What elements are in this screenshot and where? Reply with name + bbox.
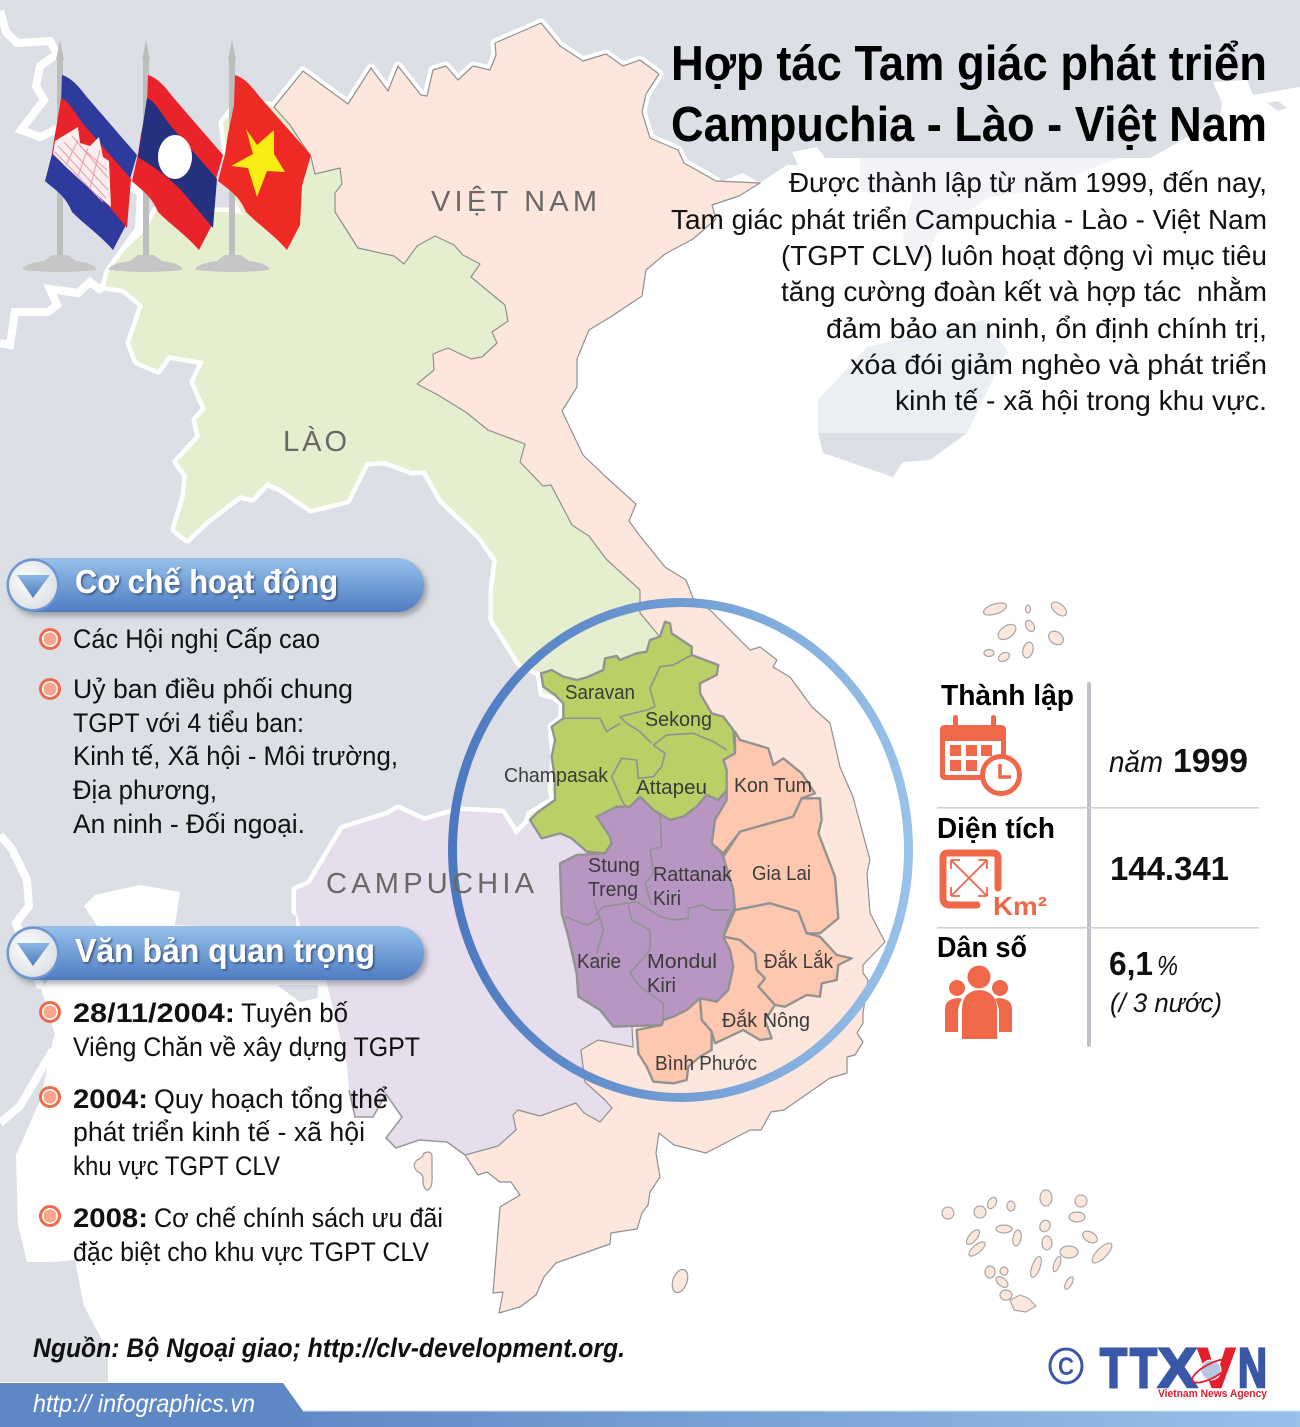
province labels: Kon Tum: [734, 775, 812, 797]
icon: calendar and clock: [940, 715, 1020, 794]
stat: Diện tích: Diện tích: [937, 813, 1055, 845]
list: Văn bản quan trọng: 2004:: [73, 1084, 148, 1114]
value: 6,1% / 3 nước: [1109, 945, 1222, 1018]
provinces: Kon Tum: [712, 732, 815, 853]
province labels: [504, 682, 834, 1075]
flag poles and bases: [23, 40, 269, 272]
logo: TTXVN: V: [1198, 1336, 1235, 1399]
list: Cơ chế hoạt động: [40, 624, 398, 839]
logo: TTXVN: X: [1158, 1336, 1197, 1399]
provinces: Lào (green): [530, 622, 735, 853]
value: năm 1999: năm: [1109, 746, 1163, 779]
province labels: Bình Phước: [655, 1053, 757, 1075]
bullet: [40, 680, 60, 698]
value: 6,1% / 3 nước: 6,1: [1109, 945, 1153, 982]
logo: TTXVN: T: [1100, 1336, 1127, 1399]
map: Cambodia coastline: [349, 1090, 465, 1155]
value: năm 1999: 1999: [1173, 742, 1248, 779]
province labels: Kiri: [653, 888, 681, 910]
map: Việt Nam: [274, 23, 885, 1313]
country labels: [283, 185, 597, 900]
country labels: CAMPUCHIA: [326, 868, 535, 900]
stats dividers: [937, 682, 1259, 1047]
section header: Cơ chế hoạt động: [6, 558, 424, 612]
provinces: Bình Phước: [637, 998, 712, 1083]
bullet: [40, 1002, 60, 1022]
logo: TTXVN: T: [1130, 1336, 1157, 1399]
province labels: Sekong: [645, 709, 712, 731]
map: Trường Sa islands: [942, 1190, 1115, 1312]
intro paragraph: Tam giác phát triển Campuchia - Lào - Việt Nam: [671, 204, 1267, 235]
value: năm 1999: [1109, 742, 1248, 779]
circle highlight around the TGPT area: [452, 602, 908, 1098]
list: Cơ chế hoạt động: An ninh - Đối ngoại.: [73, 809, 305, 839]
stat: Thành lập: Thành lập: [941, 680, 1074, 712]
logo: TTXVN: [1050, 1336, 1268, 1400]
list: Văn bản quan trọng: 28/11/2004:: [73, 998, 235, 1028]
provinces: Campuchia (purple): [560, 790, 735, 1027]
provinces: Đắk Nông: [700, 937, 775, 1043]
list: Cơ chế hoạt động: Kinh tế, Xã hội - Môi trường,: [73, 741, 398, 771]
list: Văn bản quan trọng: Cơ chế chính sách ưu đãi: [154, 1203, 443, 1233]
logo: TTXVN: C: [1058, 1353, 1074, 1381]
map: Phú Quốc island: [414, 1152, 432, 1190]
section header: Văn bản quan trọng: Văn bản quan trọng: [75, 932, 375, 969]
province labels: Champasak: [504, 765, 609, 787]
bullet: [40, 1206, 60, 1226]
intro paragraph: đảm bảo an ninh, ổn định chính trị,: [826, 313, 1267, 344]
list: Văn bản quan trọng: 2008:: [73, 1203, 148, 1233]
footer band: [0, 1383, 1300, 1427]
list: Cơ chế hoạt động: TGPT với 4 tiểu ban:: [73, 708, 304, 738]
icon: people: [945, 966, 1012, 1039]
map: Lào: [105, 100, 680, 823]
stats panel: [937, 680, 1259, 1047]
list: Văn bản quan trọng: Quy hoạch tổng thể: [154, 1084, 388, 1114]
province labels: Stung: [588, 855, 640, 877]
intro paragraph: (TGPT CLV) luôn hoạt động vì mục tiêu: [781, 240, 1267, 271]
title: Hợp tác Tam giác phát triển: [671, 37, 1267, 91]
icon: area in square kilometres: [943, 853, 1047, 921]
list: Cơ chế hoạt động: Địa phương,: [73, 775, 217, 805]
province labels: Treng: [588, 879, 638, 901]
list: Văn bản quan trọng: [40, 998, 443, 1267]
section header: Cơ chế hoạt động: Cơ chế hoạt động: [75, 563, 338, 600]
map: TGPT CLV provinces: [530, 622, 852, 1083]
stat: Dân số: Dân số: [937, 932, 1027, 964]
map: Côn Đảo island: [669, 1267, 691, 1295]
bullet: [40, 630, 60, 648]
footer band: http:// infographics.vn: [33, 1390, 255, 1418]
section header: Văn bản quan trọng: [6, 926, 424, 980]
flags on poles: [23, 40, 311, 272]
country outlines: white border strokes: [105, 23, 716, 1047]
province labels: Saravan: [565, 682, 635, 704]
provinces: Gia Lai: [723, 798, 838, 933]
list: Cơ chế hoạt động: Các Hội nghị Cấp cao: [73, 624, 320, 654]
province labels: Mondul: [647, 951, 717, 973]
province labels: Đắk Lắk: [764, 950, 834, 973]
flag: Campuchia: [45, 75, 137, 250]
title: Campuchia - Lào - Việt Nam: [671, 98, 1267, 152]
provinces: Đắk Lắk: [723, 903, 852, 1007]
list: Văn bản quan trọng: phát triển kinh tế - xã hội: [73, 1117, 365, 1147]
intro paragraph: xóa đói giảm nghèo và phát triển: [850, 349, 1267, 380]
country labels: LÀO: [283, 425, 347, 458]
list: Văn bản quan trọng: Viêng Chăn về xây dựng TGPT: [73, 1032, 420, 1062]
value: 144.341: 144.341: [1110, 850, 1229, 887]
map: Hoàng Sa islands: [982, 599, 1069, 663]
province labels: Đắk Nông: [722, 1009, 810, 1032]
list: Văn bản quan trọng: Tuyên bố: [241, 998, 348, 1028]
intro paragraph: Được thành lập từ năm 1999, đến nay,: [789, 167, 1267, 198]
list: Văn bản quan trọng: khu vực TGPT CLV: [73, 1151, 280, 1181]
flag: Lào: [132, 75, 223, 250]
province labels: Kiri: [647, 975, 676, 997]
value: 6,1% / 3 nước: %: [1157, 950, 1178, 981]
country labels: VIỆT NAM: [431, 185, 597, 218]
icon: area in square kilometres: Km²: [993, 891, 1047, 921]
logo: TTXVN: N: [1238, 1336, 1267, 1399]
flag: Việt Nam: [218, 75, 311, 250]
source line: Nguồn: Bộ Ngoại giao; http://clv-development.org.: [33, 1333, 625, 1363]
list: Văn bản quan trọng: đặc biệt cho khu vực TGPT CLV: [73, 1237, 429, 1267]
province labels: Gia Lai: [752, 863, 811, 885]
province labels: Karie: [577, 951, 621, 973]
title: [671, 37, 1267, 152]
province labels: Attapeu: [636, 777, 707, 799]
map: Campuchia: [296, 809, 660, 1155]
provinces: internal borders: [563, 655, 730, 1020]
intro paragraph: [671, 167, 1267, 416]
bullet: [40, 1088, 60, 1106]
logo: TTXVN: Vietnam News Agency: [1158, 1388, 1268, 1400]
province labels: Rattanak: [653, 864, 733, 886]
intro paragraph: tăng cường đoàn kết và hợp tác nhằm: [781, 276, 1267, 307]
value: 6,1% / 3 nước: (/ 3 nước): [1110, 988, 1222, 1018]
intro paragraph: kinh tế - xã hội trong khu vực.: [895, 385, 1267, 416]
list: Cơ chế hoạt động: Uỷ ban điều phối chung: [73, 674, 353, 704]
